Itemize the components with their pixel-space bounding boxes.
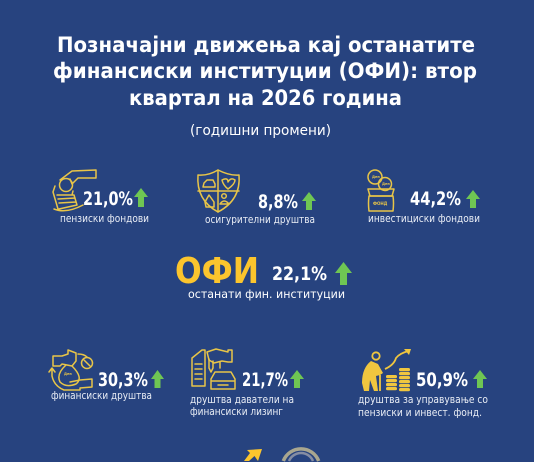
icon: elderly person, coins and rising arrow <box>362 349 411 391</box>
logo: central bank seal <box>283 449 319 461</box>
icon: coins and fund box <box>368 170 394 211</box>
panel: financial leasing companies: 21,7% <box>242 369 288 391</box>
icon: hand with money bag: Ден <box>64 372 72 376</box>
panel: pension funds: пензиски фондови <box>60 213 149 225</box>
arrow: up <box>473 370 487 388</box>
panel: investment funds: 44,2% <box>410 188 461 210</box>
panel: investment funds: инвестициски фондови <box>368 213 480 225</box>
panel: insurance companies <box>198 170 316 226</box>
icon: rocking chair with coin <box>53 170 96 211</box>
panel: financial companies: финансиски друштва <box>51 390 152 402</box>
panel: other financial institutions: ОФИ <box>175 251 259 292</box>
panel: other financial institutions: останати фин. институции <box>188 287 345 301</box>
panel: financial leasing companies: друштва даватели на <box>190 394 294 406</box>
title: квартал на 2026 година <box>129 86 402 110</box>
subtitle: (годишни промени) <box>190 123 331 139</box>
panel: pension and investment fund managers: 50,9% <box>416 369 468 391</box>
panel: financial leasing companies: финансиски лизинг <box>190 406 283 418</box>
panel: pension and investment fund managers <box>358 349 488 419</box>
icon: document, key and car <box>192 349 235 389</box>
panel: pension and investment fund managers: пензиски и инвест. фонд. <box>358 407 482 419</box>
panel: pension funds: 21,0% <box>83 188 133 210</box>
arrow: up <box>302 192 316 210</box>
panel: insurance companies: осигурителни друштва <box>205 214 315 226</box>
panel: other financial institutions <box>175 251 352 301</box>
panel: investment funds <box>368 170 480 225</box>
logo: yellow arrow <box>244 449 262 461</box>
arrow: up <box>134 188 148 207</box>
title: Позначајни движења кај останатите <box>57 33 475 57</box>
icon: coins and fund box: Ден <box>382 182 390 186</box>
arrow: up <box>335 262 352 285</box>
panel: financial companies: 30,3% <box>98 369 148 391</box>
title <box>53 33 477 110</box>
arrow: up <box>290 370 304 388</box>
arrow: up <box>466 190 480 208</box>
icon: coins and fund box: Ден <box>372 175 380 179</box>
panel: other financial institutions: 22,1% <box>272 263 327 285</box>
panel: pension funds <box>53 170 149 225</box>
title: финансиски институции (ОФИ): втор <box>53 59 477 83</box>
panel: financial leasing companies <box>190 349 304 418</box>
panel: pension and investment fund managers: друштва за управување со <box>358 394 488 406</box>
panel: financial companies <box>49 350 164 402</box>
arrow: up <box>151 370 164 388</box>
icon: coins and fund box: ФОНД <box>373 201 388 206</box>
panel: insurance companies: 8,8% <box>258 191 298 213</box>
icon: shield <box>198 170 239 212</box>
